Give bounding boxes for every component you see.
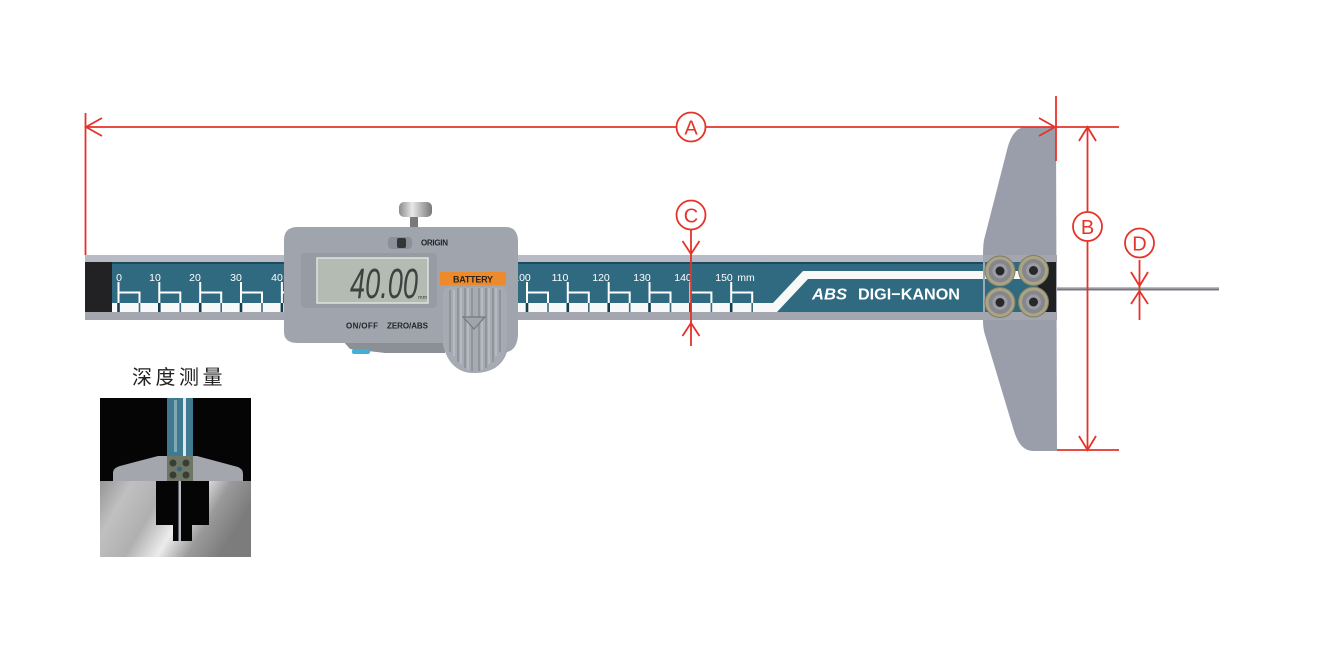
scale numbers: 100 [513, 272, 531, 284]
scale numbers: 120 [592, 272, 610, 284]
brand label: DIGI−KANON [858, 286, 960, 304]
probe [178, 481, 181, 541]
origin button [388, 237, 412, 249]
scale numbers: 20 [189, 272, 201, 284]
digital readout unit [284, 202, 518, 373]
display recess [301, 253, 437, 308]
scale numbers: 40 [271, 272, 283, 284]
inset heading: 深度测量 [132, 366, 226, 389]
white scale strip [112, 303, 753, 312]
scale numbers: 10 [149, 272, 161, 284]
scale numbers: 150 [715, 272, 733, 284]
digital readout unit: mm [418, 295, 428, 301]
scale numbers [116, 272, 755, 284]
brand label: ABS [811, 286, 847, 304]
thumb wheel [443, 287, 507, 373]
scale numbers: 130 [633, 272, 651, 284]
scale ticks [117, 282, 753, 312]
dimension A [86, 96, 1056, 255]
on/off label: ON/OFF [346, 322, 378, 330]
dimension D: D [1132, 234, 1147, 256]
dimension B [1056, 127, 1119, 450]
white diagonal stripe [753, 271, 985, 312]
reading: 40.00 [350, 260, 418, 308]
dimension C [676, 200, 706, 346]
T-shaped base [983, 127, 1057, 451]
black end block [85, 262, 112, 312]
scale numbers: 110 [552, 272, 569, 284]
dimension C: C [684, 206, 698, 228]
zero/abs label: ZERO/ABS [387, 322, 429, 330]
battery cover: BATTERY [453, 274, 493, 284]
dimension B: B [1081, 217, 1094, 239]
screws [985, 256, 1048, 318]
housing [284, 227, 518, 373]
dimension A: A [684, 118, 698, 140]
gauge base [113, 456, 243, 481]
scale numbers: 30 [230, 272, 242, 284]
origin label: ORIGIN [421, 238, 448, 248]
adjustment knob [399, 202, 432, 228]
scale numbers: mm [737, 272, 755, 284]
battery cover [440, 272, 506, 285]
stepped hole [156, 481, 209, 541]
probe rod [1055, 287, 1219, 291]
dimension D [1125, 228, 1154, 320]
gauge bar [167, 398, 193, 460]
scale numbers: 140 [674, 272, 692, 284]
lower lip and blue button [343, 341, 445, 354]
LCD [317, 258, 428, 303]
scale bar [85, 255, 985, 320]
inset photo: depth measurement [100, 398, 251, 557]
scale numbers: 0 [116, 272, 122, 284]
brand label [811, 286, 960, 304]
